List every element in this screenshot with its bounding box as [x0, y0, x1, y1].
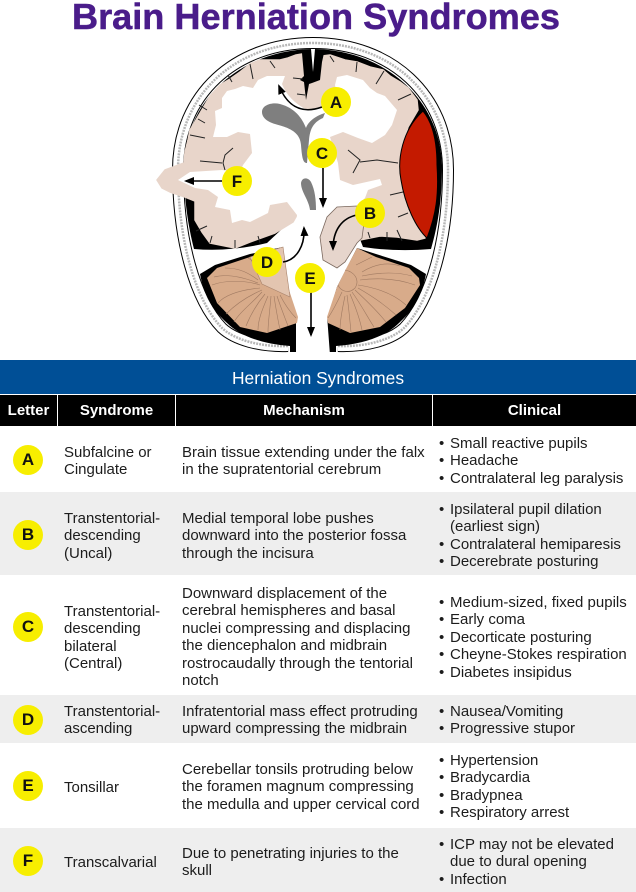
- badge F: [13, 846, 43, 876]
- clinical E: •: [439, 787, 444, 804]
- mechanism D: upward compressing the midbrain: [182, 720, 407, 737]
- clinical C: Diabetes insipidus: [450, 664, 572, 681]
- clinical E: Respiratory arrest: [450, 804, 569, 821]
- cerebellum right: [327, 248, 420, 333]
- marker D: D: [261, 253, 273, 272]
- clinical A: •: [439, 470, 444, 487]
- mechanism E: [182, 760, 420, 813]
- header: letter: Letter: [8, 402, 49, 419]
- brain cortex: [157, 54, 425, 248]
- clinical B: [439, 500, 621, 570]
- syndrome F: Transcalvarial: [64, 854, 157, 870]
- arrow C: [322, 168, 324, 206]
- badge D: [13, 705, 43, 735]
- header: syndrome: Syndrome: [80, 402, 153, 419]
- clinical A: •: [439, 452, 444, 469]
- row E: [0, 743, 636, 828]
- epidural hematoma: [400, 111, 438, 238]
- syndrome B: Transtentorial-: [64, 510, 160, 526]
- row D: [0, 695, 636, 743]
- arrow E: [310, 292, 312, 335]
- clinical C: Cheyne-Stokes respiration: [450, 646, 627, 663]
- arrow F: [186, 180, 222, 182]
- syndrome C: [64, 602, 160, 672]
- clinical F: Infection: [450, 871, 507, 888]
- badge B: B: [22, 525, 34, 544]
- brain diagram: [156, 37, 454, 352]
- row C: [0, 575, 636, 695]
- clinical E: •: [439, 752, 444, 768]
- mechanism C: nuclei compressing and displacing: [182, 620, 410, 637]
- syndrome A: Subfalcine or: [64, 444, 152, 460]
- syndrome C: (Central): [64, 655, 122, 672]
- clinical C: Early coma: [450, 611, 525, 628]
- clinical C: •: [439, 664, 444, 681]
- syndrome B: (Uncal): [64, 545, 112, 562]
- cerebellar dura right: [327, 248, 426, 352]
- tonsil: [250, 247, 290, 297]
- syndrome D: Transtentorial-: [64, 702, 160, 720]
- mechanism F: [182, 844, 399, 879]
- clinical C: [439, 594, 627, 681]
- clinical B: (earliest sign): [450, 518, 540, 535]
- mechanism C: [182, 584, 413, 689]
- third ventricle: [301, 178, 316, 210]
- marker E: [295, 263, 325, 293]
- clinical D: •: [439, 702, 444, 720]
- syndrome E: Tonsillar: [64, 778, 119, 796]
- badge A: A: [22, 450, 34, 469]
- clinical E: [439, 752, 570, 821]
- marker C: [307, 138, 337, 168]
- cerebellum left: [207, 247, 298, 333]
- clinical B: •: [439, 500, 444, 518]
- clinical E: •: [439, 804, 444, 821]
- lateral ventricles: [262, 103, 325, 163]
- clinical F: [439, 836, 614, 888]
- syndrome A: [64, 444, 152, 478]
- mechanism B: through the incisura: [182, 545, 314, 562]
- mechanism A: in the supratentorial cerebrum: [182, 461, 381, 478]
- clinical E: •: [439, 769, 444, 786]
- table title bar: Herniation Syndromes: [232, 368, 404, 388]
- syndrome C: Transtentorial-: [64, 602, 160, 620]
- badge F: F: [23, 851, 33, 870]
- clinical D: Nausea/Vomiting: [450, 702, 563, 720]
- clinical C: •: [439, 646, 444, 663]
- mechanism A: Brain tissue extending under the falx: [182, 444, 425, 460]
- clinical A: •: [439, 434, 444, 452]
- mechanism E: the medulla and upper cervical cord: [182, 796, 420, 813]
- header: mechanism: Mechanism: [263, 402, 345, 419]
- mechanism A: [182, 444, 425, 478]
- row F: [0, 828, 636, 892]
- mechanism E: the foramen magnum compressing: [182, 778, 414, 795]
- clinical B: Decerebrate posturing: [450, 553, 598, 570]
- clinical C: •: [439, 594, 444, 610]
- syndrome D: ascending: [64, 720, 132, 737]
- syndrome C: descending: [64, 620, 141, 637]
- clinical D: Progressive stupor: [450, 720, 575, 737]
- marker F: F: [232, 172, 242, 191]
- syndrome C: bilateral: [64, 638, 117, 655]
- clinical B: •: [439, 553, 444, 570]
- marker F: [222, 166, 252, 196]
- clinical A: [439, 434, 623, 487]
- row A: [0, 427, 636, 492]
- mechanism C: notch: [182, 672, 219, 689]
- mechanism B: [182, 510, 406, 562]
- syndrome A: Cingulate: [64, 461, 127, 478]
- mechanism F: Due to penetrating injuries to the: [182, 844, 399, 862]
- badge A: [13, 445, 43, 475]
- dura: [184, 49, 442, 250]
- uncal herniation: [320, 206, 365, 268]
- falx: [300, 53, 324, 100]
- header: clinical: [433, 395, 636, 426]
- clinical C: Decorticate posturing: [450, 629, 592, 646]
- marker B: B: [364, 204, 376, 223]
- badge C: [13, 612, 43, 642]
- marker C: C: [316, 144, 328, 163]
- header: syndrome: [58, 395, 175, 426]
- clinical F: •: [439, 836, 444, 852]
- syndrome D: [64, 702, 160, 737]
- badge D: D: [22, 710, 34, 729]
- cerebellar folia: [212, 257, 415, 332]
- badge E: E: [22, 776, 34, 795]
- arrow A: [279, 86, 322, 110]
- mechanism C: Downward displacement of the: [182, 584, 387, 602]
- mechanism B: downward into the posterior fossa: [182, 527, 406, 544]
- header: clinical: Clinical: [508, 402, 561, 419]
- clinical E: Hypertension: [450, 752, 538, 768]
- clinical C: •: [439, 611, 444, 628]
- clinical B: Ipsilateral pupil dilation: [450, 500, 602, 518]
- arrow D: [283, 228, 304, 262]
- marker B: [355, 198, 385, 228]
- syndrome B: [64, 510, 160, 562]
- row B: [0, 492, 636, 575]
- clinical D: [439, 702, 575, 737]
- header: letter: [0, 395, 57, 426]
- clinical B: •: [439, 536, 444, 553]
- header: mechanism: [176, 395, 432, 426]
- skull: [178, 43, 448, 346]
- mechanism E: Cerebellar tonsils protruding below: [182, 760, 413, 778]
- table title bar: [0, 360, 636, 394]
- arrow B: [333, 215, 357, 249]
- mechanism C: the diencephalon and midbrain: [182, 637, 387, 654]
- clinical A: Small reactive pupils: [450, 434, 588, 452]
- mechanism C: rostrocaudally through the tentorial: [182, 655, 413, 672]
- mechanism D: Infratentorial mass effect protruding: [182, 702, 418, 720]
- clinical E: Bradypnea: [450, 787, 523, 804]
- clinical D: •: [439, 720, 444, 737]
- clinical F: •: [439, 871, 444, 888]
- mechanism F: skull: [182, 862, 212, 879]
- clinical E: Bradycardia: [450, 769, 530, 786]
- badge E: [13, 771, 43, 801]
- mechanism C: cerebral hemispheres and basal: [182, 602, 395, 619]
- clinical C: •: [439, 629, 444, 646]
- syndrome B: descending: [64, 527, 141, 544]
- mechanism D: [182, 702, 418, 737]
- marker A: [321, 87, 351, 117]
- clinical C: Medium-sized, fixed pupils: [450, 594, 627, 610]
- clinical F: ICP may not be elevated: [450, 836, 614, 852]
- clinical F: due to dural opening: [450, 853, 587, 870]
- clinical B: Contralateral hemiparesis: [450, 536, 621, 553]
- mechanism B: Medial temporal lobe pushes: [182, 510, 374, 526]
- cerebellar dura left: [200, 247, 298, 352]
- white matter: [178, 75, 397, 355]
- clinical A: Headache: [450, 452, 518, 469]
- marker A: A: [330, 93, 342, 112]
- marker D: [252, 247, 282, 277]
- marker E: E: [304, 269, 316, 288]
- badge B: [13, 520, 43, 550]
- sulci: [190, 56, 411, 248]
- badge C: C: [22, 617, 34, 636]
- clinical A: Contralateral leg paralysis: [450, 470, 623, 487]
